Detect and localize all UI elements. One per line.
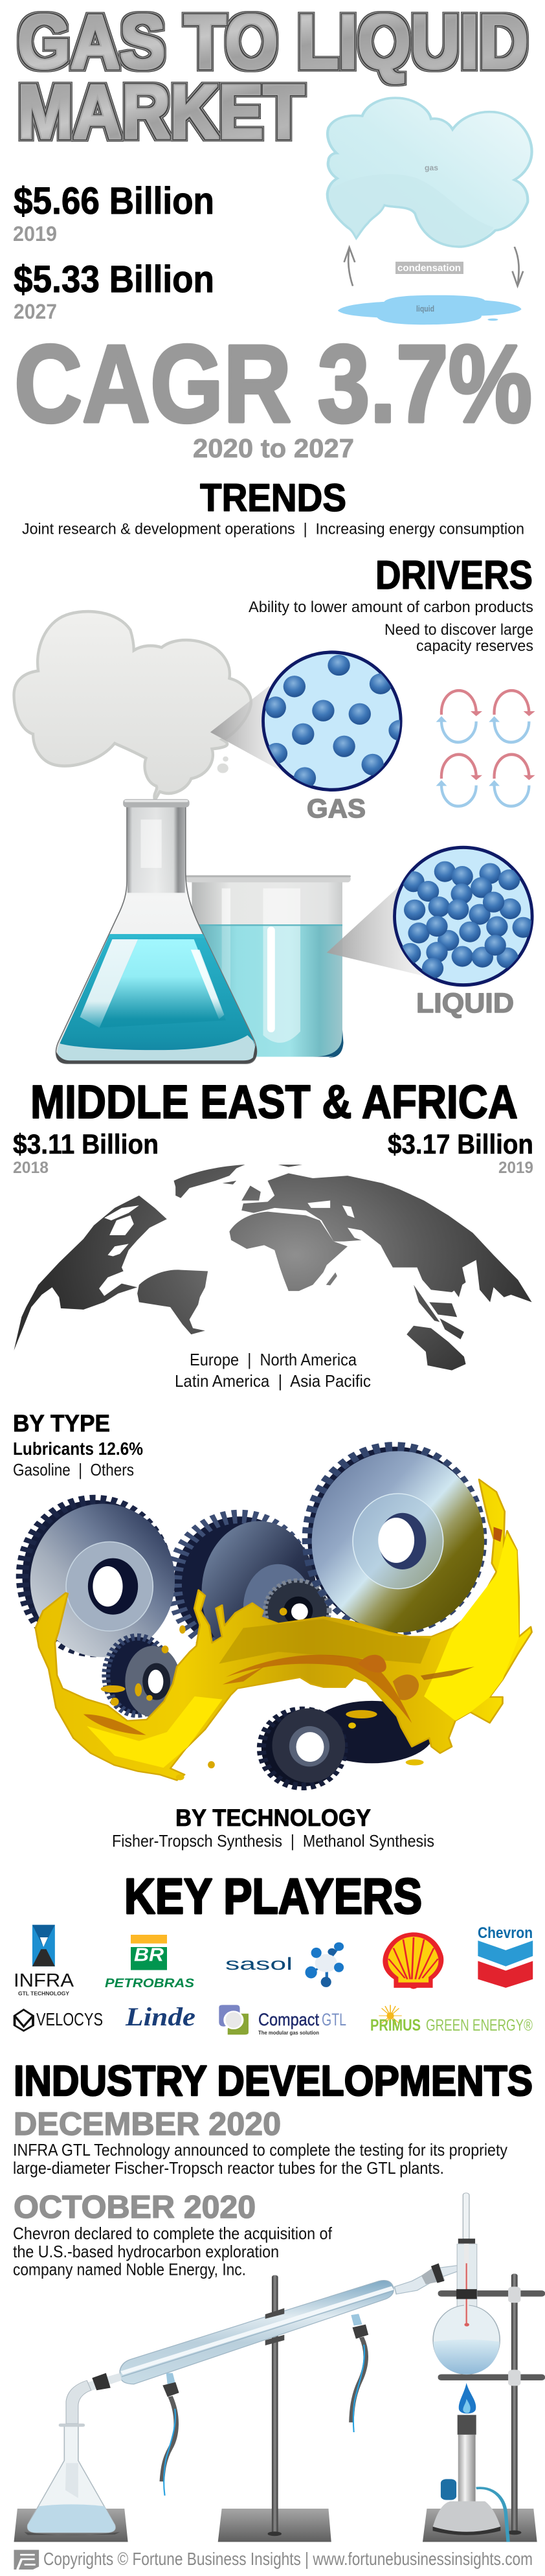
water outlet hose [351, 2314, 368, 2432]
october 2020 text [13, 2224, 333, 2279]
beaker [186, 875, 351, 1058]
other regions text [175, 1350, 371, 1391]
logo: CompactGTL: Compact [258, 2010, 319, 2029]
logo: Chevron [478, 1924, 533, 1988]
drivers text: capacity reserves [416, 637, 533, 655]
logo: Sasol [225, 1943, 344, 1987]
by type leader: Lubricants 12.6% [13, 1439, 143, 1459]
december 2020 heading: DECEMBER 2020 [14, 2106, 281, 2142]
logo: CompactGTL: GTL [322, 2010, 346, 2029]
puddle of liquid [338, 295, 522, 325]
december 2020 text: large-diameter Fischer-Tropsch reactor tubes for the GTL plants. [13, 2158, 444, 2178]
stat: 2019 market value: $5.66 Billion [14, 180, 214, 222]
left gear [22, 1500, 175, 1657]
logo: Linde: Linde [125, 2002, 195, 2031]
arrow down [513, 247, 523, 286]
callout fan: gas [210, 686, 285, 773]
logo: Sasol: sasol [225, 1954, 293, 1974]
condenser clamps [265, 2308, 284, 2345]
stat: 2019 market value: 2019 [13, 222, 57, 245]
logo: Primus Green Energy: PRIMUS [370, 2016, 421, 2035]
logo: Velocys: VELOCYS [36, 2009, 103, 2029]
gas label: GAS [307, 793, 366, 823]
oil splash [36, 1479, 532, 1780]
stat: 2019 regional value [388, 1129, 533, 1177]
flask [56, 799, 257, 1064]
logo: Petrobras: PETROBRAS [105, 1977, 194, 1990]
stat: 2027 market value [14, 258, 214, 323]
october 2020 text: company named Noble Energy, Inc. [13, 2259, 246, 2279]
world map globe [14, 1165, 532, 1371]
trends heading: TRENDS [200, 476, 346, 519]
logo: Petrobras: BR [134, 1944, 164, 1965]
logo: CompactGTL [219, 2005, 346, 2036]
title [17, 0, 528, 155]
illustration: distillation apparatus [14, 2193, 545, 2542]
right stand [438, 2274, 545, 2535]
title: MARKET [17, 69, 304, 155]
stat: 2018 regional value: 2018 [13, 1159, 49, 1177]
bottom gear [261, 1708, 345, 1786]
logo: Petrobras [105, 1935, 194, 1990]
stat: 2019 regional value: 2019 [498, 1159, 533, 1177]
stat: 2018 regional value [13, 1129, 159, 1177]
trends text: Joint research & development operations | Increasing energy consumption [22, 521, 524, 538]
illustration: flask, beaker and molecule callouts [14, 611, 534, 1064]
callout fan: liquid [327, 881, 426, 977]
other regions text: Europe | North America [190, 1350, 357, 1369]
base plates [14, 2509, 537, 2542]
other regions text: Latin America | Asia Pacific [175, 1371, 371, 1391]
big right gear [307, 1446, 484, 1632]
gas label: gas [425, 163, 438, 172]
october 2020 text: Chevron declared to complete the acquisition of [13, 2224, 333, 2243]
liquid label: LIQUID [416, 988, 514, 1019]
logo: INFRA GTL Technology [14, 1925, 74, 1996]
december 2020 text [13, 2140, 507, 2178]
illustration: gas to liquid condensation cycle [328, 98, 532, 325]
circle: liquid molecules [394, 847, 534, 985]
CAGR headline: 2020 to 2027 [193, 433, 354, 463]
logo: CompactGTL: The modular gas solution [258, 2030, 319, 2036]
water inlet hose [162, 2373, 179, 2496]
rear dark gear [309, 1701, 434, 1763]
stat: 2019 market value [13, 180, 214, 245]
drivers text: Ability to lower amount of carbon products [249, 598, 533, 616]
smoke cloud [14, 611, 251, 799]
by type heading: BY TYPE [13, 1410, 110, 1437]
cloud of gas [328, 98, 532, 247]
small center gear [265, 1580, 329, 1640]
middle gear [173, 1516, 317, 1664]
october 2020 heading: OCTOBER 2020 [14, 2190, 256, 2225]
stat: 2018 regional value: $3.11 Billion [13, 1129, 159, 1160]
liquid label: liquid [416, 304, 434, 313]
condenser [66, 2263, 460, 2424]
stat: 2027 market value: 2027 [14, 300, 57, 323]
footer [14, 2549, 533, 2570]
condensation label: condensation [397, 263, 461, 273]
by technology heading: BY TECHNOLOGY [175, 1805, 371, 1831]
by type others: Gasoline | Others [13, 1460, 134, 1479]
stat: 2027 market value: $5.33 Billion [14, 258, 214, 301]
small left gear [106, 1637, 181, 1717]
circle: gas molecules [263, 652, 411, 790]
drivers text: Need to discover large [384, 621, 533, 639]
logo: Chevron: Chevron [478, 1924, 533, 1942]
arrow up [344, 247, 355, 286]
drivers text [249, 598, 533, 655]
key players heading: KEY PLAYERS [124, 1869, 422, 1924]
footer logo [14, 2550, 39, 2570]
center stand [267, 2275, 282, 2536]
logo: Velocys [15, 2009, 103, 2031]
thermometer and round flask [433, 2193, 500, 2375]
logo: Shell [383, 1932, 443, 1989]
logo: INFRA GTL Technology: GTL TECHNOLOGY [18, 1991, 70, 1996]
receiving flask [25, 2424, 120, 2535]
by technology text: Fisher-Tropsch Synthesis | Methanol Synthesis [112, 1831, 434, 1851]
bunsen burner [433, 2383, 508, 2542]
logo: Primus Green Energy [370, 2005, 533, 2035]
illustration: gears with oil splash [22, 1446, 532, 1786]
logo: INFRA GTL Technology: INFRA [14, 1970, 74, 1991]
october 2020 text: the U.S.-based hydrocarbon exploration [13, 2242, 279, 2261]
cycle arrows [438, 690, 533, 806]
